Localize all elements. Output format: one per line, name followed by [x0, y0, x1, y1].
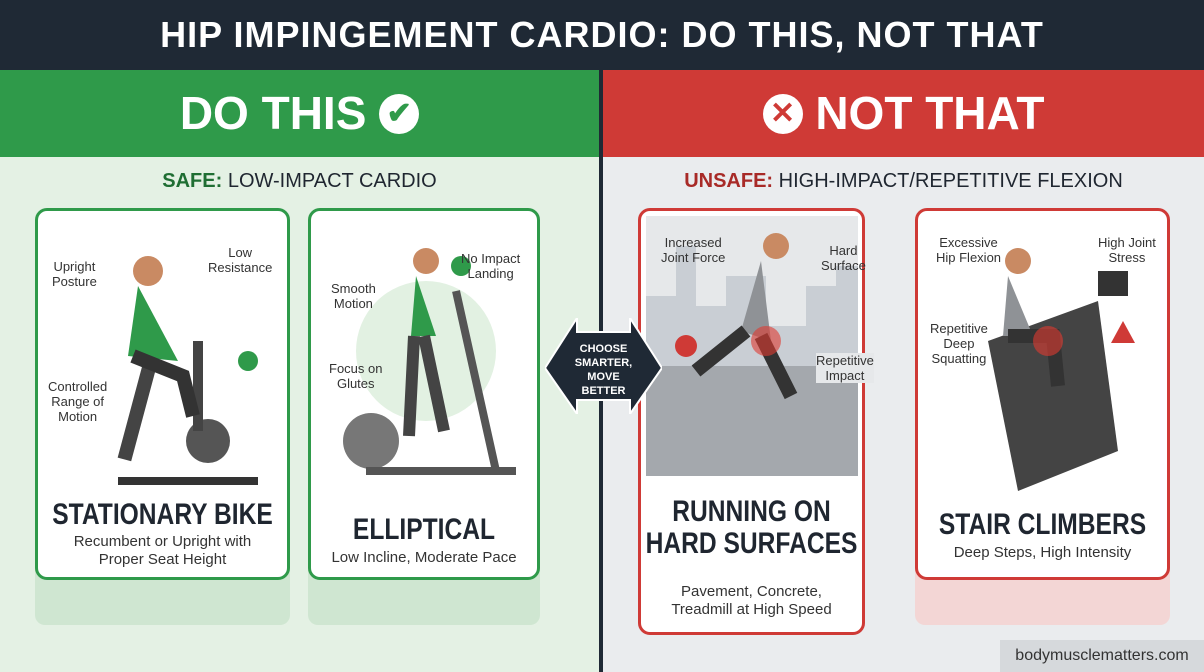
footer url — [1000, 640, 1204, 672]
card: stair climbers: Deep Steps, High Intensity — [954, 544, 1131, 561]
arrow: choose smarter: SMARTER, — [575, 357, 632, 369]
subheading unsafe: UNSAFE: HIGH-IMPACT/REPETITIVE FLEXION — [684, 170, 1123, 192]
arrow: choose smarter: MOVE — [587, 371, 620, 383]
arrow: choose smarter — [545, 318, 662, 414]
card: stair climbers: Hip Flexion — [936, 250, 1001, 265]
title bar: HIP IMPINGEMENT CARDIO: DO THIS, NOT THAT — [160, 14, 1044, 55]
illustration stair climber — [988, 248, 1135, 491]
footer url: bodymusclematters.com — [1015, 647, 1189, 664]
card: stationary bike: Recumbent or Upright with — [74, 533, 251, 550]
card: stationary bike: STATIONARY BIKE — [52, 498, 273, 531]
card: running — [638, 208, 865, 635]
card: stationary bike — [35, 208, 290, 580]
heading: do this: ✔ — [387, 97, 412, 130]
card: stationary bike: Posture — [52, 274, 97, 289]
card: stationary bike: Controlled — [48, 379, 107, 394]
card: elliptical: Focus on — [329, 361, 382, 376]
card: stair climbers: STAIR CLIMBERS — [939, 508, 1146, 541]
card: running: Impact — [825, 368, 864, 383]
card: elliptical: No Impact — [461, 251, 520, 266]
card: stair climbers: Excessive — [939, 235, 998, 250]
illustration elliptical — [343, 248, 516, 475]
faded shadows — [35, 560, 290, 625]
card: running: Surface — [821, 258, 866, 273]
illustration running — [646, 216, 858, 476]
subheading safe: SAFE: LOW-IMPACT CARDIO — [162, 170, 437, 192]
heading: not that: ✕ — [770, 97, 795, 130]
divider — [599, 70, 603, 672]
card: elliptical: Smooth — [331, 281, 376, 296]
heading: do this: DO THIS — [180, 87, 366, 139]
heading: not that: NOT THAT — [815, 87, 1044, 139]
card: running: Increased — [665, 235, 722, 250]
panel: not that background — [603, 70, 1204, 672]
card: running: Repetitive — [816, 353, 874, 368]
heading: do this — [0, 70, 599, 157]
card: elliptical: Landing — [467, 266, 514, 281]
card: elliptical: Motion — [334, 296, 373, 311]
arrow: choose smarter: BETTER — [582, 385, 626, 397]
card: stationary bike: Resistance — [208, 260, 272, 275]
card: stair climbers: High Joint — [1098, 235, 1156, 250]
card: stationary bike: Range of — [51, 394, 104, 409]
heading: not that — [603, 70, 1204, 157]
card: stair climbers: Repetitive — [930, 321, 988, 336]
card: stair climbers: Stress — [1108, 250, 1145, 265]
title bar — [0, 0, 1204, 70]
card: stationary bike: Upright — [53, 259, 95, 274]
card: running: Joint Force — [661, 250, 725, 265]
card: running: HARD SURFACES — [646, 527, 857, 560]
card: elliptical: Glutes — [337, 376, 375, 391]
illustration bike — [118, 256, 258, 485]
panel: do this background — [0, 70, 599, 672]
arrow: choose smarter: CHOOSE — [580, 343, 627, 355]
card: running: Hard — [829, 243, 858, 258]
card: elliptical — [308, 208, 540, 580]
card: stair climbers — [915, 208, 1170, 580]
card: stationary bike: Low — [228, 245, 252, 260]
card: elliptical: ELLIPTICAL — [353, 513, 495, 546]
card: running: Treadmill at High Speed — [671, 601, 832, 618]
card: running: Pavement, Concrete, — [681, 583, 822, 600]
card: running: RUNNING ON — [672, 495, 831, 528]
card: stationary bike: Proper Seat Height — [99, 551, 226, 568]
card: elliptical: Low Incline, Moderate Pace — [331, 549, 517, 566]
card: stair climbers: Squatting — [931, 351, 986, 366]
card: stationary bike: Motion — [58, 409, 97, 424]
card: stair climbers: Deep — [943, 336, 974, 351]
